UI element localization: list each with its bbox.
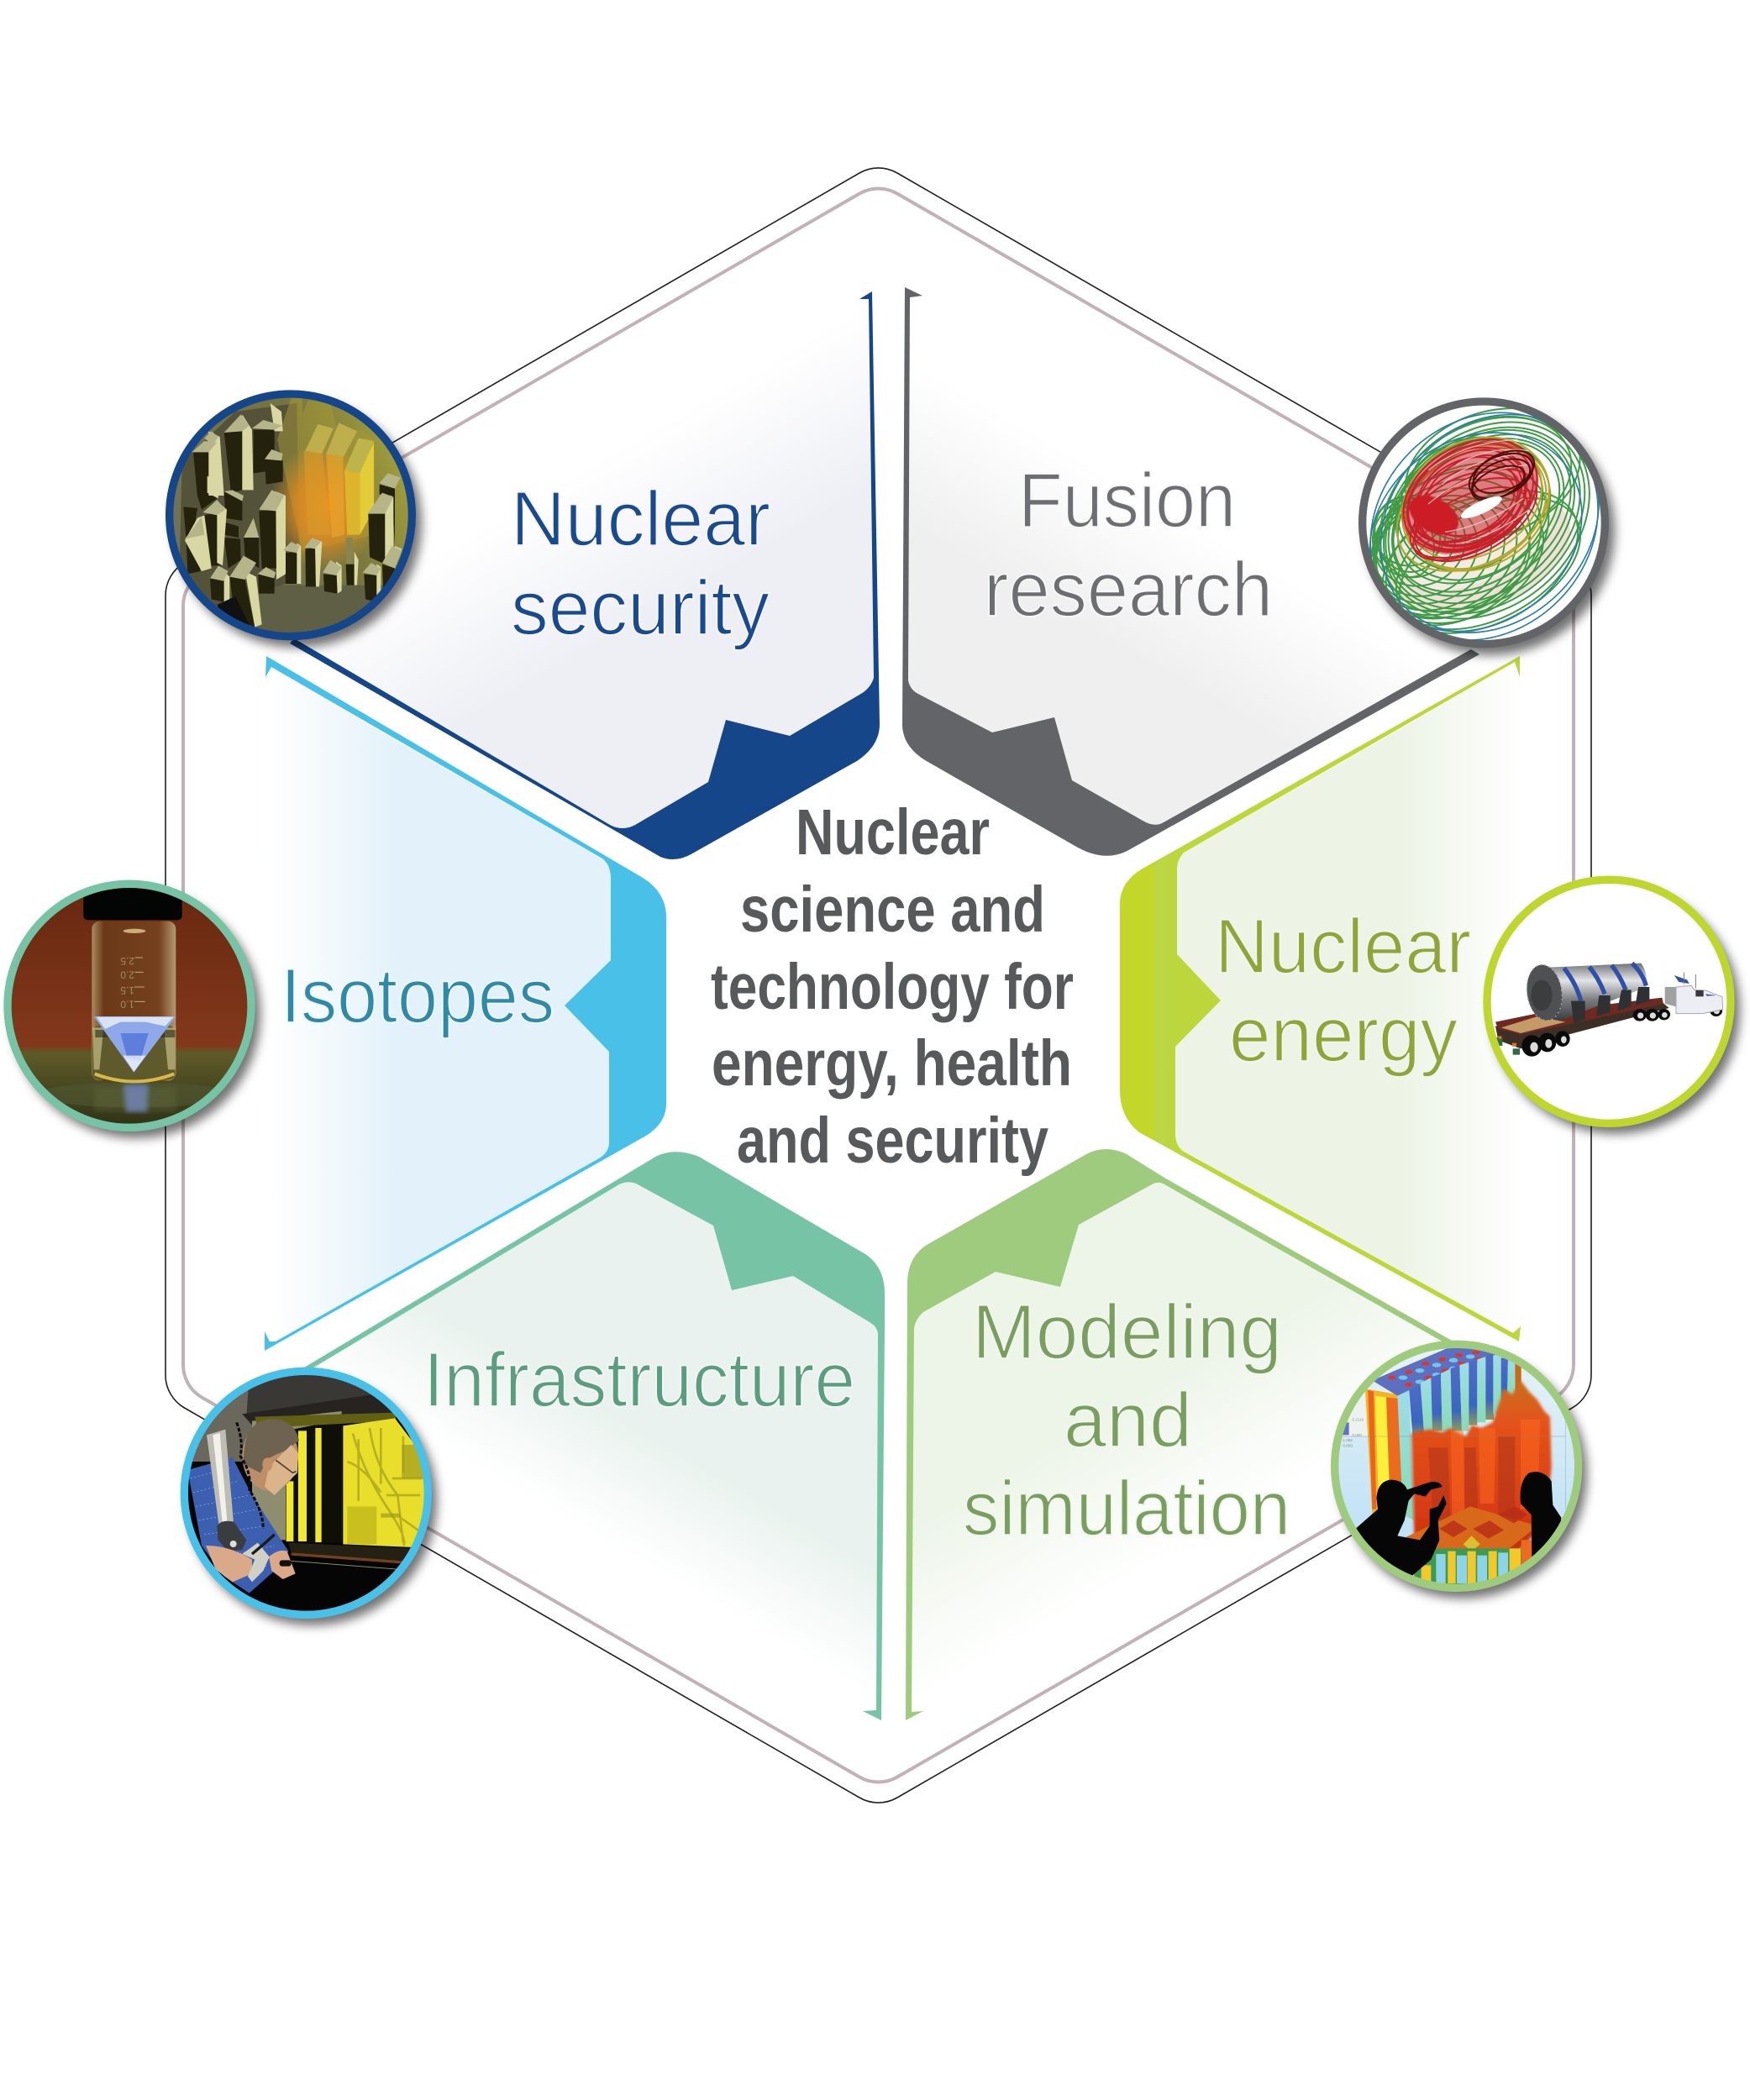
panel: nuclear energy — [1120, 656, 1521, 1341]
panel: infrastructure — [300, 1152, 885, 1720]
vial glass — [92, 921, 176, 1081]
hands and tool — [206, 1546, 252, 1582]
scale values — [1343, 1418, 1364, 1448]
heading: nuclear energy: Nuclear — [1215, 904, 1471, 990]
central title: science and — [740, 874, 1045, 946]
vial graduation marks: 2.5 — [120, 955, 134, 967]
panel: isotopes — [265, 656, 666, 1351]
central title: energy, health — [712, 1027, 1072, 1100]
vial graduation marks — [121, 958, 134, 1008]
vial cap — [83, 888, 182, 921]
inner window — [252, 1411, 342, 1540]
scale values: 0.000 — [1343, 1444, 1353, 1448]
vial graduation marks: 1.5 — [120, 984, 134, 996]
photo circle: isotopes vial — [5, 879, 254, 1130]
central title: Nuclear — [796, 796, 990, 869]
panel: nuclear security — [290, 291, 880, 859]
infographic: nuclear science hexagon — [3, 167, 1747, 1803]
scale values: 0.2116 — [1352, 1418, 1364, 1422]
blue glowing cone — [94, 1016, 176, 1073]
heading: infrastructure: Infrastructure — [423, 1337, 855, 1423]
simulation side stripes — [1365, 1389, 1403, 1515]
equipment inside window — [347, 1428, 423, 1546]
ring — [1335, 1344, 1579, 1588]
band: infrastructure arrow — [300, 1152, 885, 1720]
ring — [1363, 402, 1605, 644]
pole — [207, 1430, 234, 1526]
window sill — [288, 1543, 412, 1562]
band: nuclear energy arrow — [1120, 656, 1521, 1341]
silhouette: left person — [1355, 1480, 1447, 1577]
worker shirt — [187, 1457, 288, 1593]
ring — [8, 884, 251, 1127]
heading: nuclear security — [511, 476, 770, 651]
ring — [184, 1371, 428, 1614]
top hex lattice — [1372, 1347, 1515, 1396]
panel: fusion research — [902, 287, 1479, 856]
orange flame volume — [1411, 1380, 1552, 1554]
heading: nuclear energy — [1215, 904, 1471, 1078]
coiled cable — [237, 1422, 263, 1529]
ring — [1487, 879, 1731, 1123]
heading: nuclear energy: energy — [1229, 992, 1458, 1078]
white streaks — [1428, 439, 1529, 543]
heading: modeling and simulation: Modeling — [972, 1289, 1282, 1375]
base stripes — [1414, 1548, 1554, 1585]
scale values: 0.000 — [1352, 1433, 1362, 1437]
vertical reactor stripes — [1397, 1390, 1414, 1520]
band: isotopes arrow — [265, 656, 666, 1351]
heading: modeling and simulation: and — [1064, 1378, 1192, 1463]
vial graduation marks: 2.0 — [120, 969, 134, 981]
screen edge — [1336, 1420, 1565, 1509]
reactor base diamonds — [1406, 1506, 1537, 1551]
silhouette: right person — [1521, 1472, 1561, 1557]
heading: nuclear security: security — [511, 565, 770, 651]
central title: technology for — [711, 951, 1074, 1023]
head — [242, 1421, 298, 1491]
reactor vessel — [1543, 963, 1647, 1021]
dark red inner lines — [1469, 450, 1536, 501]
wheels — [1521, 1005, 1722, 1057]
heading: fusion research: research — [984, 547, 1273, 633]
photo circle: infrastructure worker — [181, 1368, 431, 1621]
band: modeling arrow — [906, 1149, 1453, 1720]
photo circle: fusion magnetic field lines — [1358, 397, 1622, 663]
heading: fusion research: Fusion — [1018, 458, 1236, 543]
central title — [711, 796, 1074, 1177]
heading: modeling and simulation — [963, 1289, 1290, 1551]
scale values: 1.086 — [1343, 1438, 1353, 1442]
outer hexagon border — [166, 168, 1591, 1803]
red core field lines — [1403, 438, 1537, 563]
band: fusion research arrow — [902, 287, 1479, 856]
photo circle: nuclear security city — [166, 391, 415, 641]
truck tractor — [1665, 987, 1676, 1006]
blue reflection — [123, 1085, 149, 1111]
photo circle: reactor simulation with silhouettes — [1332, 1341, 1582, 1590]
heading: modeling and simulation: simulation — [963, 1466, 1290, 1551]
band: nuclear security arrow — [290, 291, 880, 859]
vial graduation marks: 1.0 — [120, 999, 134, 1011]
blue edge field lines — [1369, 412, 1600, 640]
hood frame — [247, 1375, 371, 1413]
heading: isotopes: Isotopes — [281, 953, 554, 1039]
trailer deck — [1495, 1001, 1669, 1048]
ring — [170, 394, 412, 637]
central title: and security — [737, 1105, 1048, 1177]
panel: modeling and simulation — [906, 1149, 1453, 1720]
olive transitional field lines — [1396, 437, 1551, 572]
photo circle: reactor on truck — [1485, 877, 1733, 1126]
vessel saddles — [1571, 987, 1649, 1023]
green outer field lines — [1371, 407, 1590, 634]
heading: fusion research — [984, 458, 1273, 633]
heading: nuclear security: Nuclear — [511, 476, 770, 562]
